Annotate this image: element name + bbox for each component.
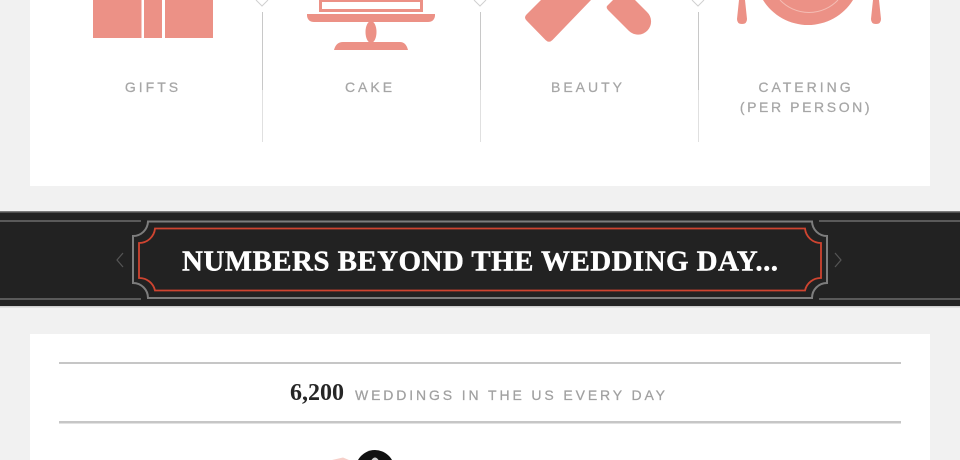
dividers with diamonds bbox=[256, 0, 704, 142]
label: catering: (PER PERSON) bbox=[740, 99, 872, 115]
arrow: right bbox=[835, 253, 841, 267]
icon: cake bbox=[307, 0, 435, 50]
ornate frame: outer bbox=[133, 222, 827, 298]
ornate frame: red inner bbox=[139, 228, 821, 290]
icon: couple (cropped) bbox=[332, 450, 392, 460]
label: cake: CAKE bbox=[345, 79, 395, 95]
arrow: left bbox=[117, 253, 123, 267]
stat: 6,200 weddings: WEDDINGS IN THE US EVERY DAY bbox=[355, 387, 666, 403]
panel: wedding costs bbox=[30, 0, 930, 186]
heading: NUMBERS BEYOND THE WEDDING DAY... bbox=[182, 246, 778, 278]
panel: weddings per day bbox=[30, 334, 930, 460]
label: catering: CATERING bbox=[758, 79, 854, 95]
stat: 6,200 weddings bbox=[290, 380, 666, 406]
banner: numbers beyond the wedding day bbox=[0, 211, 960, 308]
label: beauty: BEAUTY bbox=[551, 79, 625, 95]
stat: 6,200 weddings: 6,200 bbox=[290, 380, 344, 406]
icon: catering bbox=[737, 0, 881, 25]
icon: gifts bbox=[93, 0, 213, 38]
label: gifts: GIFTS bbox=[125, 79, 181, 95]
label: catering bbox=[740, 79, 872, 115]
icon: beauty bbox=[525, 0, 651, 42]
